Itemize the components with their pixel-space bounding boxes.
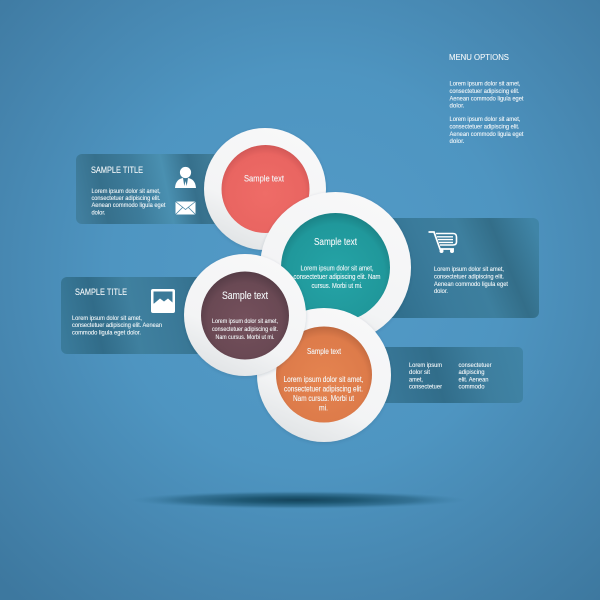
- card text column 1: dolor sit: [409, 369, 430, 376]
- panel: upper right card: [385, 218, 539, 318]
- label: Sample text: [307, 346, 342, 356]
- menu options text block: [449, 52, 524, 145]
- body text: Nam cursus. Morbi ut: [293, 394, 355, 403]
- paragraph 1: Lorem ipsum dolor sit amet,: [450, 80, 521, 88]
- body text: Lorem ipsum dolor sit amet,: [212, 318, 278, 325]
- circle: teal: [260, 192, 411, 343]
- icon: envelope: [176, 202, 196, 214]
- heading: menu options: MENU OPTIONS: [449, 52, 509, 62]
- card text: consectetuer adipiscing elit.: [434, 274, 504, 280]
- body text: Nam cursus. Morbi ut mi.: [216, 334, 275, 341]
- card text: Aenean commodo ligula eget: [434, 281, 508, 288]
- body text: [294, 264, 380, 290]
- circle: orange: [257, 308, 391, 442]
- paragraph 1: Aenean commodo ligula eget: [450, 95, 524, 102]
- label: Sample text: [244, 172, 284, 184]
- card text: Lorem ipsum dolor sit amet,: [434, 266, 504, 273]
- icon: person: [175, 167, 196, 188]
- body text: Lorem ipsum dolor sit amet,: [284, 375, 364, 384]
- card text column 2: commodo: [458, 384, 485, 391]
- body text: Lorem ipsum dolor sit amet,: [300, 264, 374, 273]
- circle: plum: [184, 254, 306, 376]
- card text column 1: amet,: [409, 376, 423, 383]
- card text: [92, 188, 166, 216]
- paragraph 1: dolor.: [450, 103, 465, 110]
- panel: top left card: [76, 154, 226, 224]
- paragraph 1: consectetuer adipiscing elit.: [450, 88, 520, 95]
- body text: [212, 318, 278, 341]
- card text: [434, 266, 508, 295]
- card text column 1: Lorem ipsum: [409, 362, 442, 369]
- card text column 2: elit. Aenean: [458, 376, 489, 383]
- paragraph 2: dolor.: [450, 138, 465, 145]
- card text: commodo ligula eget dolor.: [72, 330, 141, 336]
- card text: consectetuer adipiscing elit.: [92, 195, 161, 202]
- card text column 2: adipiscing: [458, 369, 485, 376]
- card text: consectetuer adipiscing elit. Aenean: [72, 322, 162, 329]
- body text: consectetuer adipiscing elit. Nam: [294, 272, 380, 281]
- body text: consectetuer adipiscing elit.: [212, 326, 278, 333]
- paragraph 2: [450, 116, 524, 145]
- card text: dolor.: [434, 288, 448, 295]
- card text column 1: [409, 362, 442, 391]
- panel: middle left card: [61, 277, 211, 354]
- ground shadow: [130, 491, 466, 509]
- body text: mi.: [319, 404, 328, 413]
- card text: Lorem ipsum dolor sit amet,: [72, 315, 142, 322]
- paragraph 2: Aenean commodo ligula eget: [450, 131, 524, 138]
- circle: red: [204, 128, 326, 250]
- paragraph 2: consectetuer adipiscing elit.: [450, 124, 520, 131]
- card text: Aenean commodo ligula eget: [92, 202, 166, 209]
- card text column 2: [458, 362, 492, 391]
- panel: lower right card: [370, 347, 523, 403]
- body text: [284, 375, 364, 413]
- card title: SAMPLE TITLE: [75, 287, 127, 297]
- card text column 1: consectetuer: [409, 384, 442, 391]
- card text column 2: consectetuer: [458, 362, 492, 369]
- label: Sample text: [314, 237, 357, 248]
- card text: [72, 315, 162, 336]
- icon: picture: [151, 289, 175, 313]
- card title: SAMPLE TITLE: [91, 165, 143, 175]
- label: Sample text: [222, 290, 268, 302]
- card text: Lorem ipsum dolor sit amet,: [92, 188, 161, 195]
- paragraph 2: Lorem ipsum dolor sit amet,: [450, 116, 521, 123]
- body text: cursus. Morbi ut mi.: [312, 281, 362, 290]
- card text: dolor.: [92, 209, 106, 216]
- paragraph 1: [450, 80, 524, 110]
- body text: consectetuer adipiscing elit.: [284, 385, 363, 394]
- icon: shopping cart: [428, 232, 456, 253]
